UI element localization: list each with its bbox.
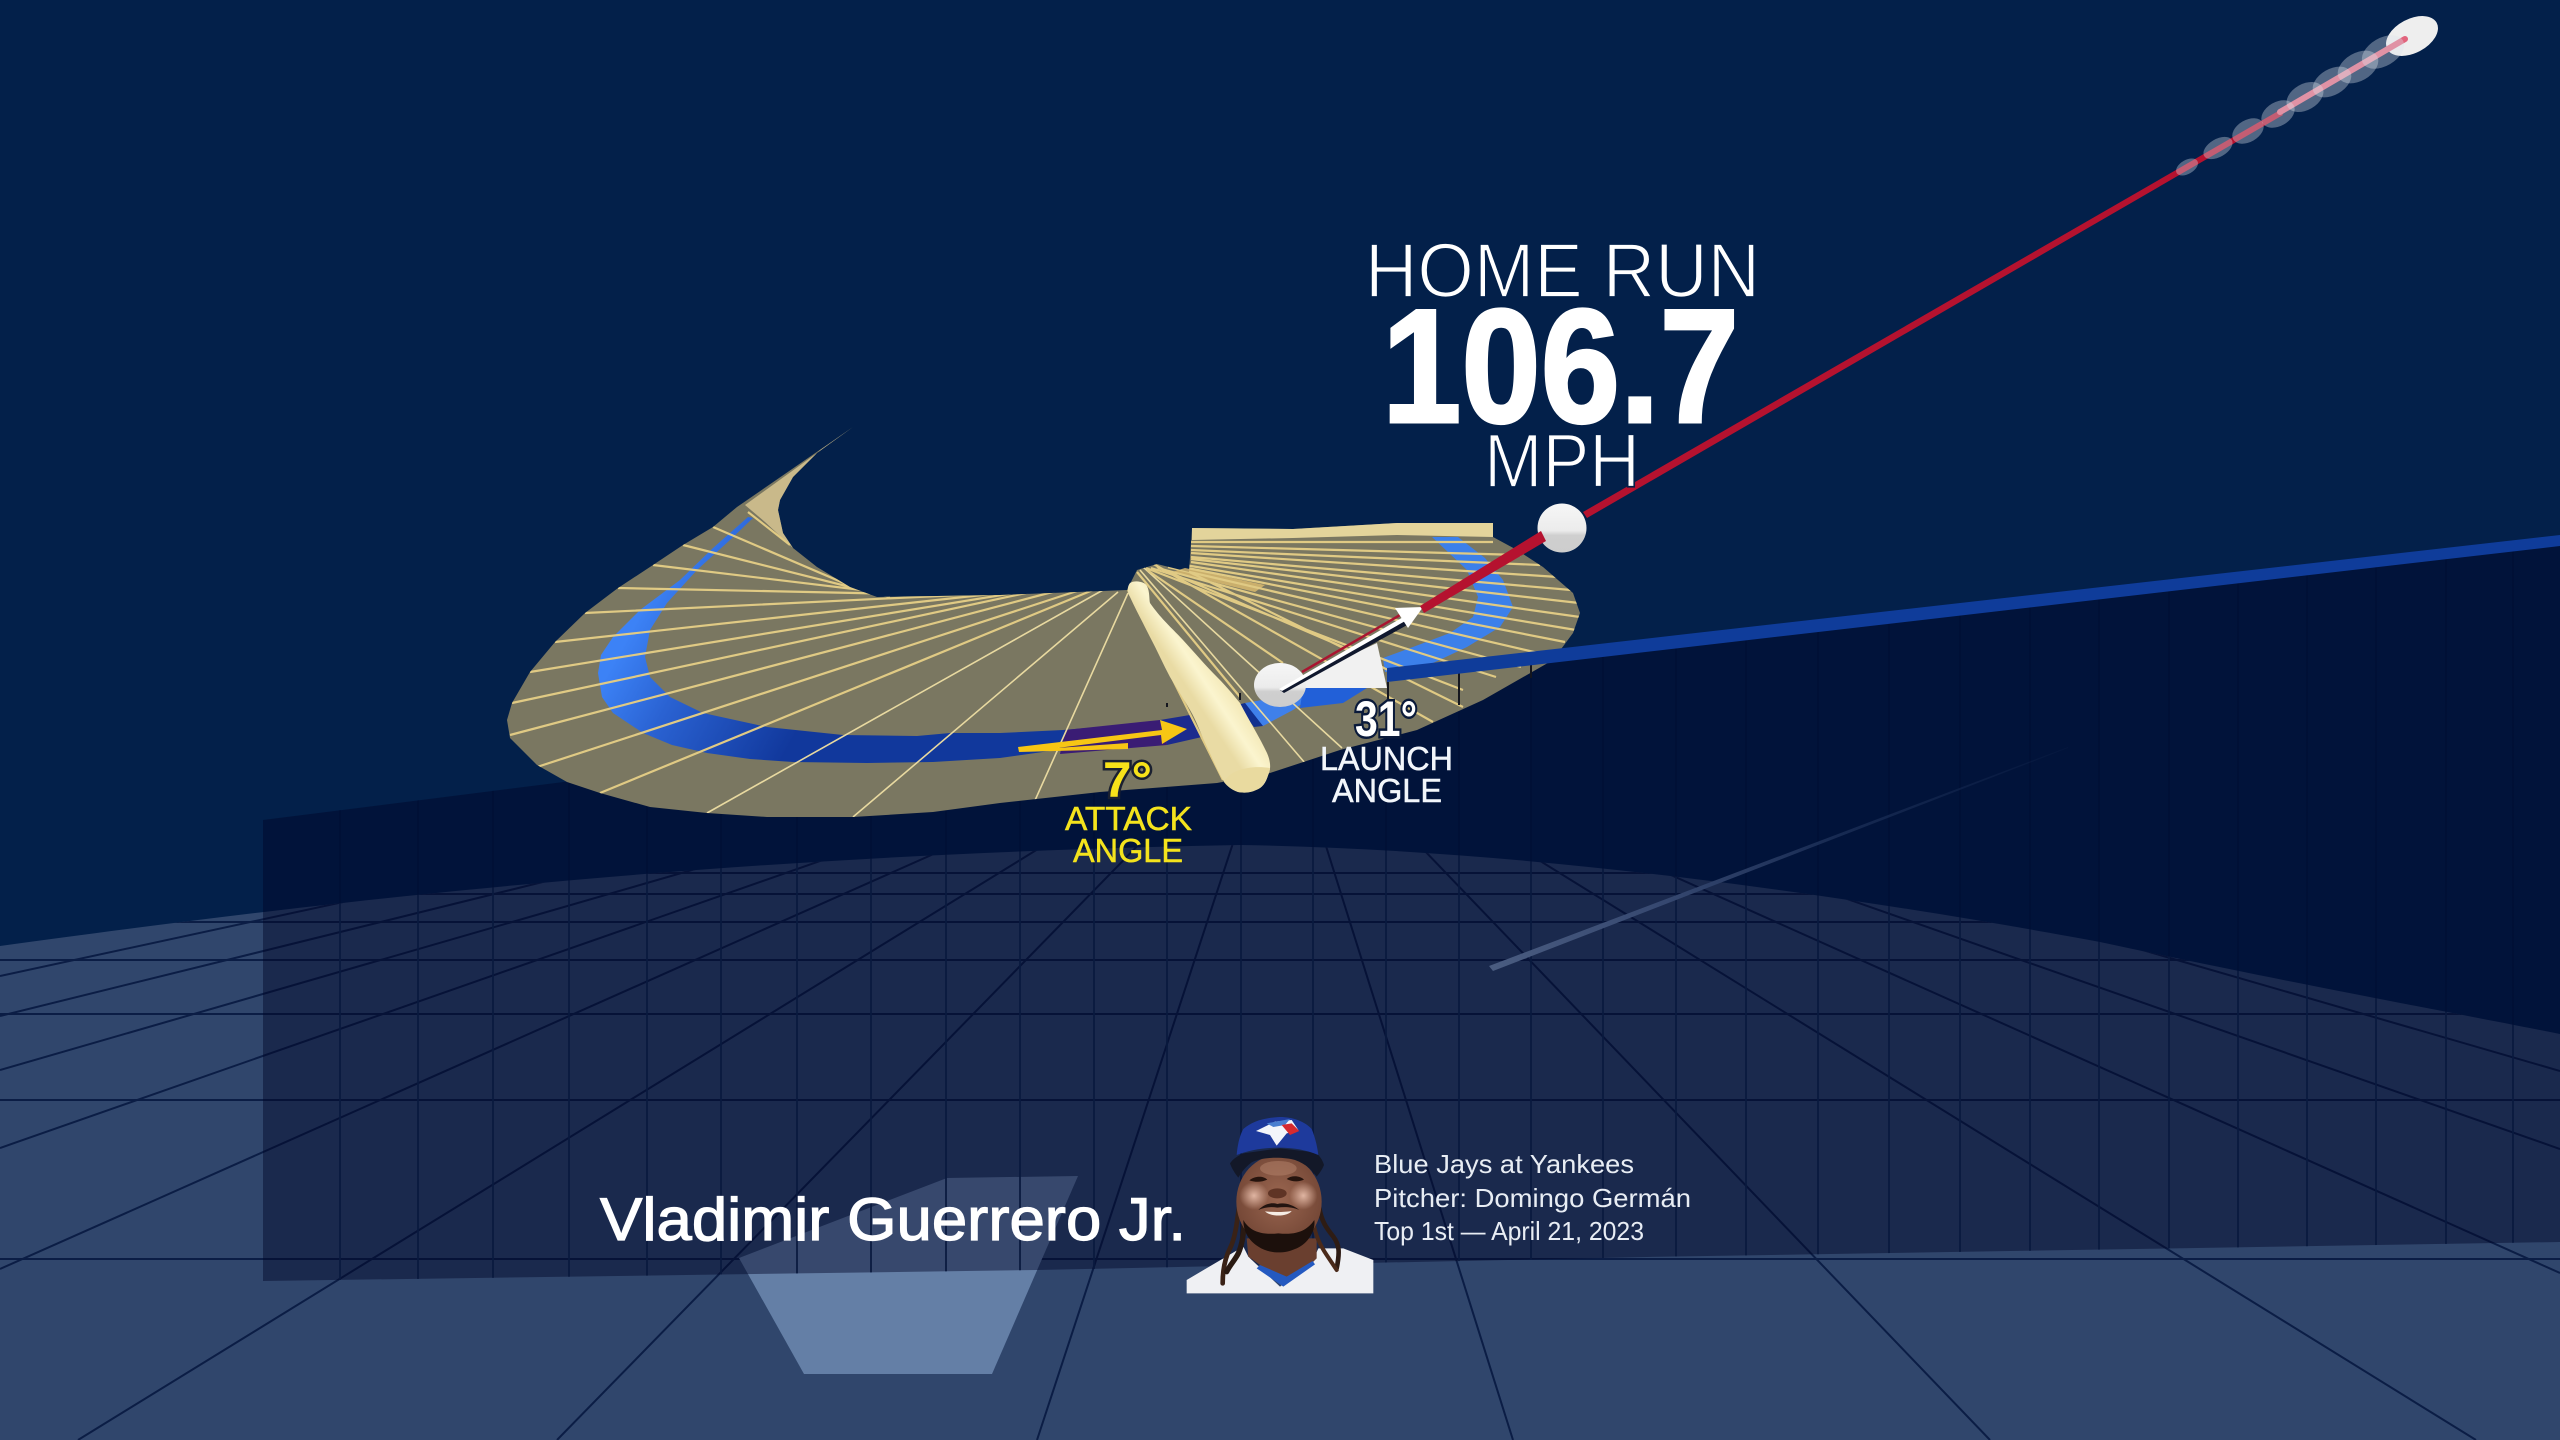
blue swing path right arc — [1383, 537, 1513, 672]
navy segment beside bat — [1160, 715, 1202, 745]
headline: home run: HOME RUN — [1365, 228, 1760, 314]
cap crown — [1237, 1117, 1318, 1155]
launch angle label: 31° — [1355, 691, 1417, 747]
neck — [1247, 1238, 1317, 1282]
batter name: Vladimir Guerrero Jr. — [600, 1186, 1186, 1253]
game information: Top 1st — April 21, 2023 — [1374, 1216, 1644, 1246]
blue band under wedge — [1300, 688, 1367, 708]
game information: Blue Jays at Yankees — [1374, 1149, 1634, 1179]
exit velocity value: 106.7 — [1382, 276, 1739, 457]
attack angle label: ANGLE — [1073, 832, 1183, 869]
teeth — [1265, 1211, 1292, 1216]
swing plane disc — [507, 427, 1580, 817]
attack angle label: 7° — [1103, 752, 1152, 808]
wall tick marks seen through disc — [1167, 662, 1531, 707]
dense cream wedge — [1172, 568, 1265, 592]
forehead highlight — [1260, 1161, 1297, 1176]
velocity unit: MPH — [1484, 419, 1640, 504]
launch arrow — [1279, 607, 1423, 693]
back wall with grid — [263, 500, 2560, 1300]
red ball flight near — [1420, 531, 1546, 613]
cap brim — [1230, 1148, 1324, 1178]
purple attack segment — [1060, 720, 1167, 754]
disc surface — [507, 427, 1580, 817]
second ball — [1538, 504, 1586, 552]
cream top band — [1192, 523, 1493, 540]
beard — [1243, 1220, 1315, 1252]
attack angle label — [1065, 752, 1192, 869]
moustache — [1258, 1203, 1299, 1210]
blue plate line — [1387, 535, 2560, 682]
jersey — [1187, 1247, 1373, 1293]
cream tip of the swoosh — [745, 427, 853, 548]
blue swing path left arc — [598, 517, 1200, 763]
dark blue sliver tip — [1237, 703, 1263, 727]
game information: Pitcher: Domingo Germán — [1374, 1183, 1691, 1213]
attack angle label: ATTACK — [1065, 800, 1192, 837]
launch angle wedge — [1280, 643, 1387, 688]
bat — [1128, 581, 1270, 793]
radial swing lines — [510, 512, 1580, 817]
hair strands — [1223, 1205, 1339, 1283]
nose — [1268, 1188, 1287, 1198]
home plate shadow — [739, 1176, 1078, 1374]
floor with perspective grid — [0, 845, 2560, 1440]
face — [1236, 1155, 1322, 1248]
launch angle label: ANGLE — [1332, 772, 1442, 809]
eyes — [1249, 1176, 1304, 1182]
faint ball shadow track — [1489, 747, 2068, 971]
launch angle label: LAUNCH — [1320, 740, 1453, 777]
contact ball — [1254, 663, 1306, 707]
thin red line above launch arrow — [1302, 615, 1400, 672]
player headshot — [1187, 1117, 1373, 1293]
cheek highlights — [1239, 1182, 1269, 1210]
launch angle label — [1320, 691, 1453, 809]
game information — [1374, 1149, 1691, 1246]
attack angle arrow — [1018, 720, 1187, 752]
cap logo — [1256, 1119, 1299, 1146]
collar — [1257, 1261, 1315, 1287]
blue sliver near bat — [1245, 693, 1303, 726]
red ball flight far — [1583, 8, 2445, 518]
